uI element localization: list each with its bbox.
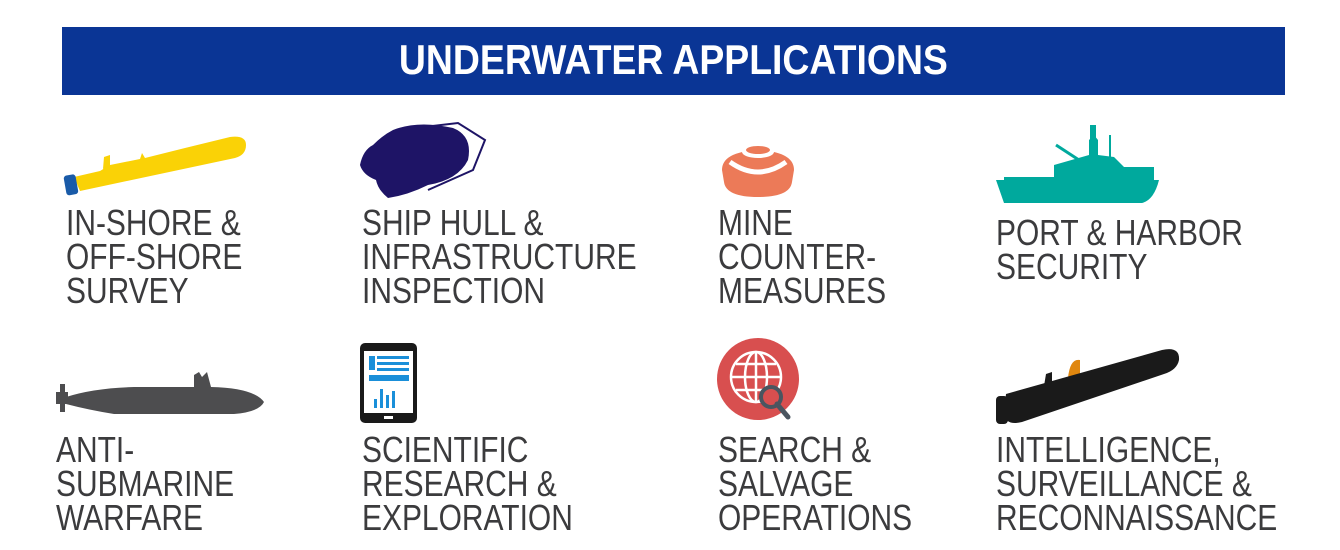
text: scientific: SCIENTIFIC: [362, 429, 528, 470]
text: ship hull: INFRASTRUCTURE: [362, 236, 637, 277]
icon: hull inspection ROV: [360, 122, 486, 198]
text: ship hull: INSPECTION: [362, 270, 545, 311]
text: ship hull: [362, 202, 637, 311]
icon: yellow AUV: [64, 136, 246, 196]
text: search: SEARCH &: [718, 429, 871, 470]
icon: patrol ship: [996, 125, 1159, 203]
text: in-shore: IN-SHORE &: [66, 202, 241, 243]
text: mine: MEASURES: [718, 270, 886, 311]
text: search: [718, 429, 912, 538]
text: anti-submarine: [56, 429, 234, 538]
icon: black torpedo AUV: [996, 349, 1180, 424]
text: intelligence: [996, 429, 1277, 538]
text: scientific: RESEARCH &: [362, 463, 557, 504]
text: mine: [718, 202, 886, 311]
text: scientific: [362, 429, 573, 538]
text: search: OPERATIONS: [718, 497, 912, 538]
text: in-shore: [66, 202, 242, 311]
text: in-shore: SURVEY: [66, 270, 189, 311]
text: port: SECURITY: [996, 246, 1147, 287]
text: intelligence: SURVEILLANCE &: [996, 463, 1252, 504]
text: intelligence: RECONNAISSANCE: [996, 497, 1277, 538]
text: anti-submarine: WARFARE: [56, 497, 203, 538]
title banner: UNDERWATER APPLICATIONS: [399, 36, 948, 83]
title banner: [62, 27, 1285, 95]
text: port: PORT & HARBOR: [996, 212, 1243, 253]
text: ship hull: SHIP HULL &: [362, 202, 543, 243]
text: in-shore: OFF-SHORE: [66, 236, 242, 277]
icon: mine: [722, 146, 794, 197]
text: scientific: EXPLORATION: [362, 497, 573, 538]
icon: globe search: [717, 338, 799, 420]
text: mine: MINE: [718, 202, 793, 243]
text: search: SALVAGE: [718, 463, 853, 504]
icon: submarine: [56, 372, 264, 414]
text: anti-submarine: SUBMARINE: [56, 463, 234, 504]
text: port: [996, 212, 1243, 287]
text: mine: COUNTER-: [718, 236, 876, 277]
text: anti-submarine: ANTI-: [56, 429, 134, 470]
text: intelligence: INTELLIGENCE,: [996, 429, 1221, 470]
icon: tablet: [360, 343, 417, 423]
